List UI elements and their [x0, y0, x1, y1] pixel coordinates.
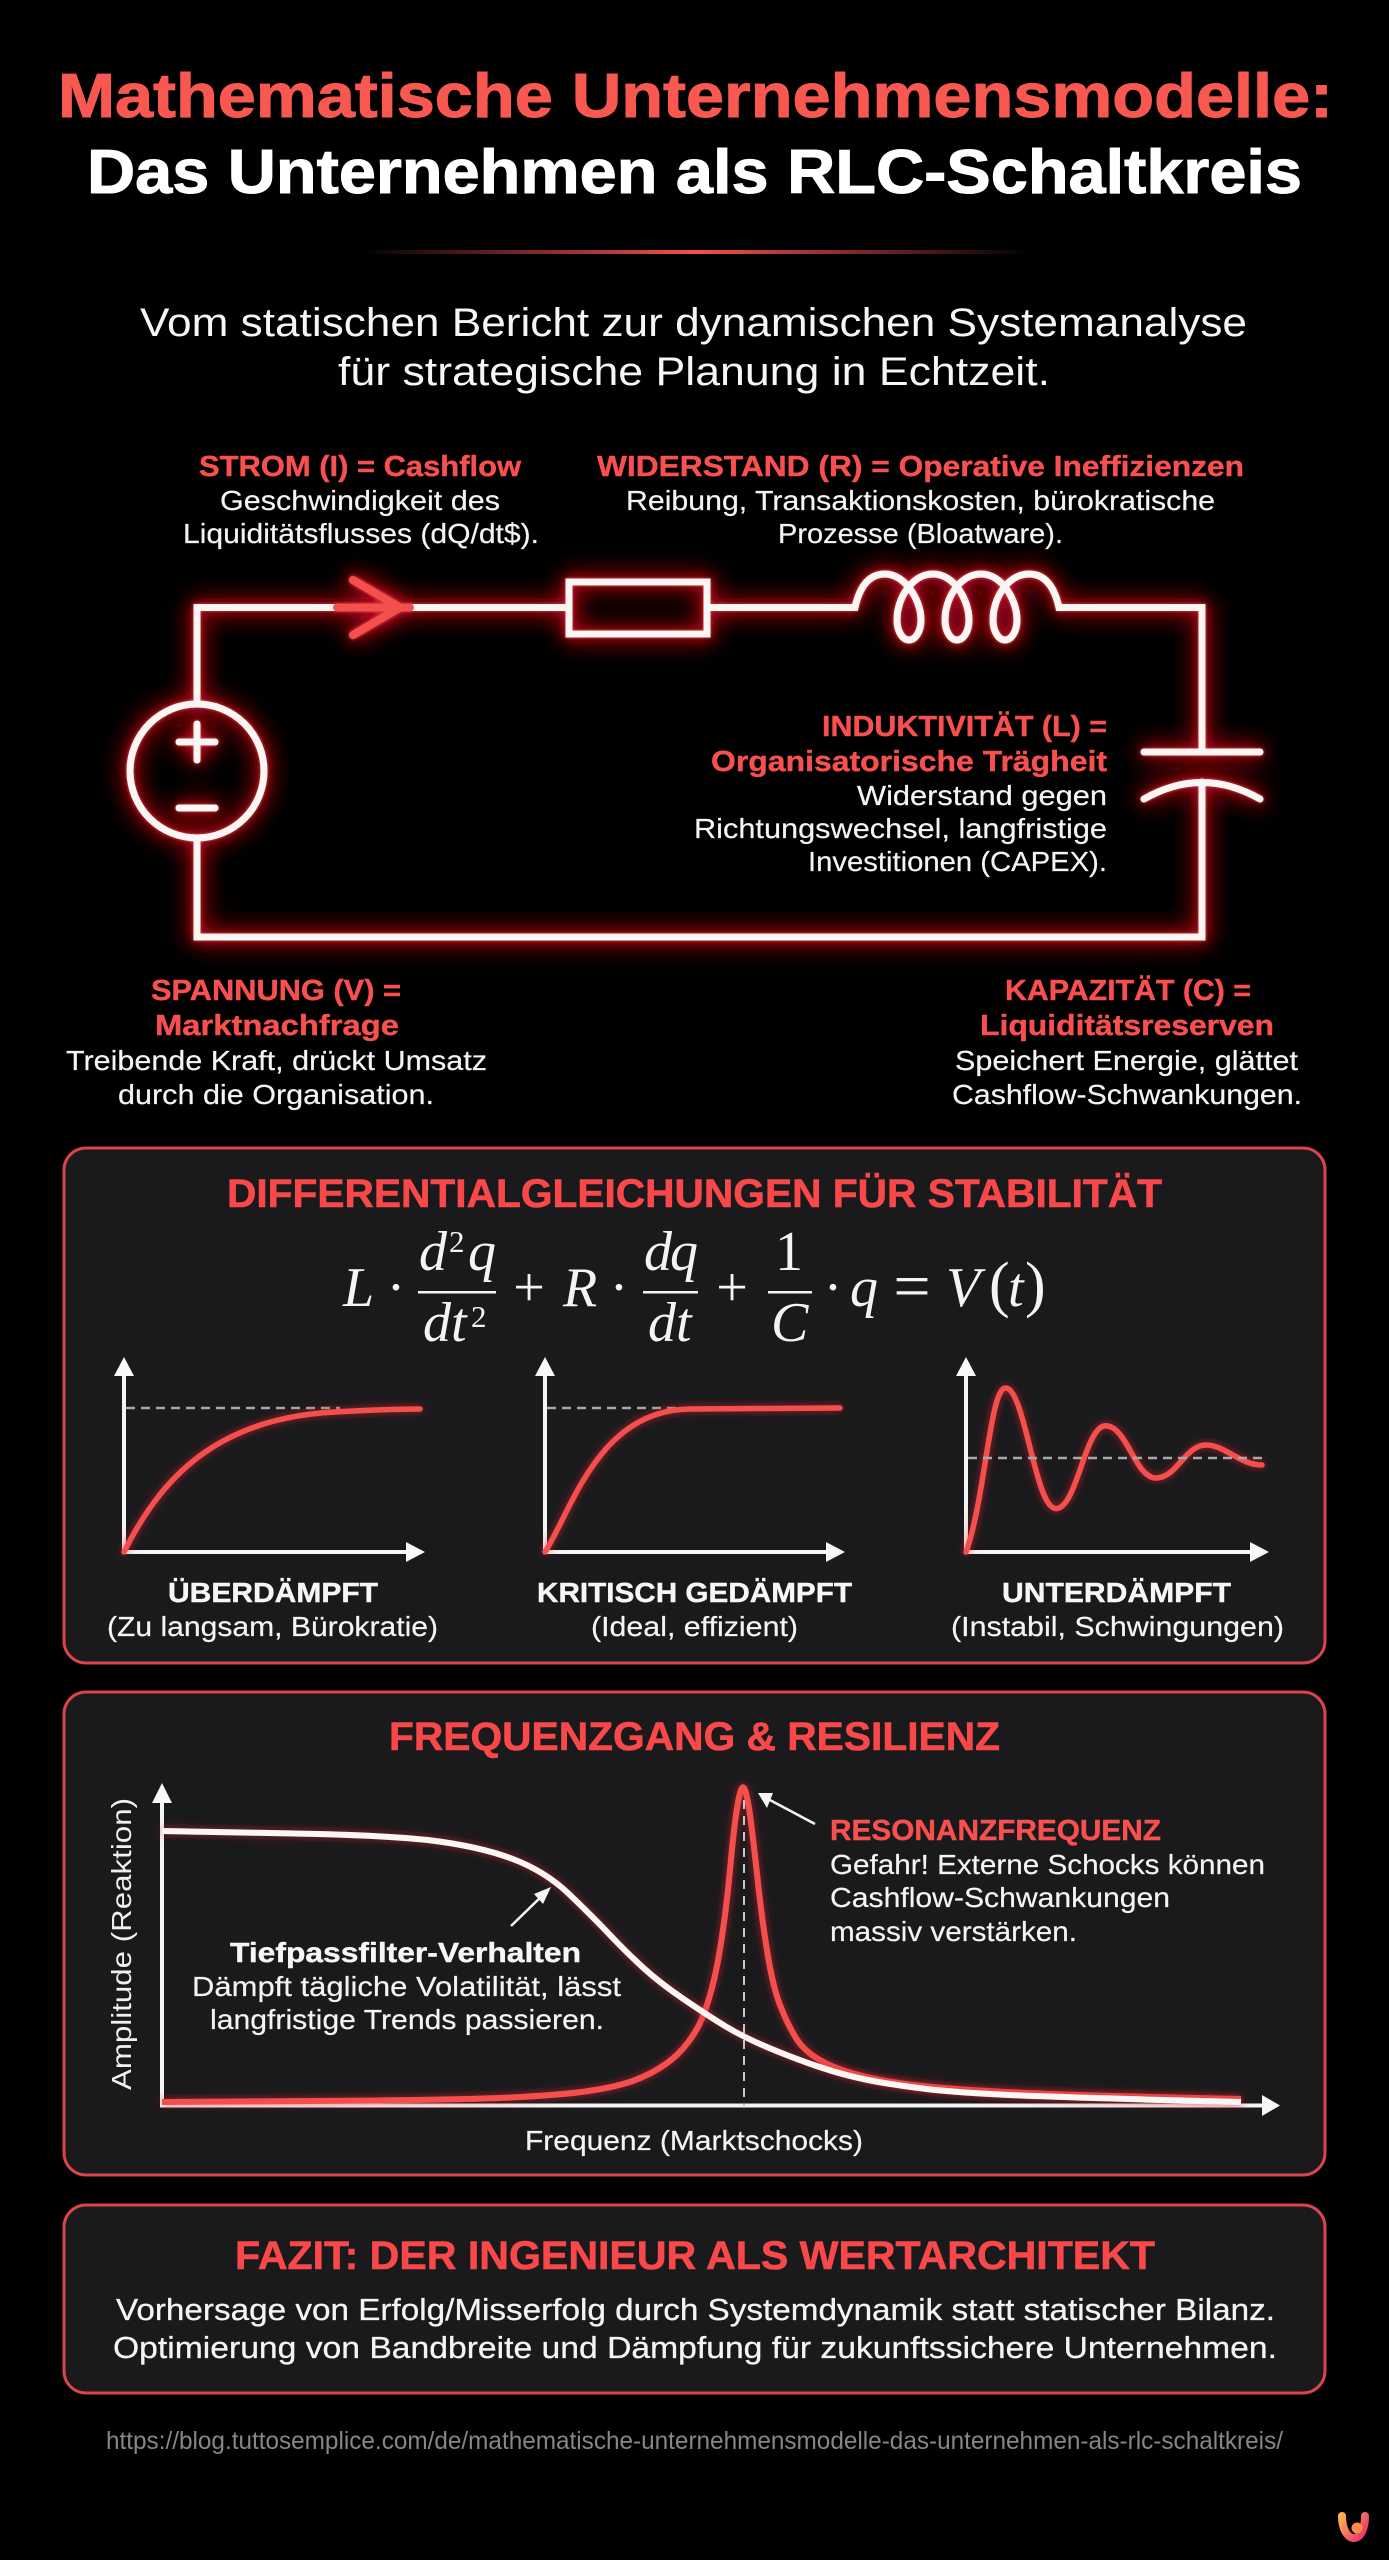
label: Spannung: SPANNUNG (V) =: [151, 975, 401, 1007]
icon: logo: [1342, 2516, 1365, 2538]
label: Kapazitaet: Liquiditätsreserven: [980, 1010, 1274, 1042]
title: [58, 62, 1333, 207]
callout: resonance: [830, 1815, 1265, 1947]
callout: low-pass: langfristige Trends passieren.: [210, 2004, 604, 2035]
callout: resonance: massiv verstärken.: [830, 1916, 1077, 1947]
label: Strom: Liquiditätsflusses (dQ/dt$).: [183, 518, 539, 549]
panel: conclusion: [64, 2205, 1325, 2393]
equation: 1: [775, 1221, 803, 1283]
chart label: overdamped: [107, 1577, 438, 1642]
equation: q: [850, 1257, 878, 1319]
conclusion text: Optimierung von Bandbreite und Dämpfung für zukunftssichere Unternehmen.: [113, 2330, 1277, 2365]
equation: R: [562, 1257, 597, 1319]
equation: [342, 1221, 1046, 1354]
label: Strom: Geschwindigkeit des: [220, 485, 500, 516]
label: Kapazitaet: KAPAZITÄT (C) =: [1005, 974, 1251, 1007]
panel: frequency response: [64, 1692, 1325, 2175]
equation: d: [644, 1221, 673, 1283]
equation: C: [771, 1292, 809, 1354]
equation: t: [451, 1292, 468, 1354]
capacitor: [1144, 752, 1260, 799]
title divider: [359, 250, 1032, 254]
equation: +: [513, 1257, 545, 1319]
chart: critically damped: [535, 1357, 845, 1562]
equation: q: [468, 1221, 496, 1283]
panel heading: FAZIT: DER INGENIEUR ALS WERTARCHITEKT: [235, 2234, 1155, 2278]
label: Kapazitaet: Speichert Energie, glättet: [955, 1045, 1298, 1076]
label: Spannung: [66, 975, 487, 1110]
chart label: overdamped: ÜBERDÄMPFT: [168, 1577, 378, 1608]
source url: https://blog.tuttosemplice.com/de/mathematische-unternehmensmodelle-das-unternehmen-als-rlc-schaltkreis/: [106, 2427, 1283, 2455]
equation: ·: [387, 1257, 405, 1319]
label: Widerstand: [597, 451, 1244, 549]
equation: ): [1025, 1251, 1046, 1319]
equation: 2: [471, 1299, 486, 1334]
label: Induktivitaet: Richtungswechsel, langfristige: [694, 813, 1107, 844]
equation: ·: [610, 1257, 628, 1319]
callout: low-pass: Dämpft tägliche Volatilität, lässt: [192, 1971, 621, 2002]
callout: resonance: Cashflow-Schwankungen: [830, 1882, 1170, 1913]
label: Spannung: Marktnachfrage: [155, 1010, 399, 1042]
panel: differential equations: [64, 1148, 1325, 1663]
label: Widerstand: Reibung, Transaktionskosten, bürokratische: [626, 485, 1215, 516]
label: Spannung: durch die Organisation.: [118, 1079, 434, 1110]
callout: low-pass: [192, 1937, 621, 2035]
callout: low-pass: Tiefpassfilter-Verhalten: [230, 1937, 581, 1968]
label: Induktivitaet: [694, 710, 1107, 877]
label: Kapazitaet: [952, 974, 1302, 1110]
label: Widerstand: Prozesse (Bloatware).: [778, 518, 1063, 549]
chart label: underdamped: UNTERDÄMPFT: [1002, 1577, 1231, 1608]
chart label: critically damped: KRITISCH GEDÄMPFT: [537, 1577, 852, 1608]
equation: +: [716, 1257, 748, 1319]
equation: L: [342, 1257, 374, 1319]
equation: t: [676, 1292, 693, 1354]
chart label: underdamped: [951, 1577, 1284, 1642]
equation: 2: [449, 1224, 464, 1259]
circuit diagram: [130, 574, 1260, 937]
label: Induktivitaet: INDUKTIVITÄT (L) =: [822, 710, 1107, 743]
equation: ·: [824, 1257, 842, 1319]
y axis label: Amplitude (Reaktion): [106, 1798, 137, 2090]
label: Widerstand: WIDERSTAND (R) = Operative Ineffizienzen: [597, 451, 1244, 483]
conclusion text: [113, 2292, 1277, 2365]
x axis label: Frequenz (Marktschocks): [525, 2125, 863, 2156]
arrow: low-pass: [511, 1887, 551, 1926]
callout: resonance: RESONANZFREQUENZ: [830, 1815, 1161, 1847]
arrow: resonance: [758, 1793, 815, 1824]
subtitle: [140, 301, 1247, 394]
chart label: critically damped: [537, 1577, 852, 1642]
chart: overdamped: [114, 1357, 425, 1562]
label: Strom: STROM (I) = Cashflow: [199, 451, 521, 483]
chart label: critically damped: (Ideal, effizient): [591, 1611, 798, 1642]
voltage source: [130, 704, 264, 838]
label: Kapazitaet: Cashflow-Schwankungen.: [952, 1079, 1302, 1110]
current arrow: [337, 580, 410, 635]
equation: V: [946, 1257, 986, 1319]
frequency chart: [152, 1783, 1280, 2116]
callout: resonance: Gefahr! Externe Schocks können: [830, 1849, 1265, 1880]
title: Mathematische Unternehmensmodelle:: [58, 62, 1333, 131]
equation: q: [670, 1221, 698, 1283]
equation: d: [419, 1221, 448, 1283]
label: Strom: [183, 451, 539, 549]
label: Induktivitaet: Organisatorische Trägheit: [711, 746, 1107, 778]
conclusion text: Vorhersage von Erfolg/Misserfolg durch Systemdynamik statt statischer Bilanz.: [116, 2292, 1275, 2327]
equation: =: [893, 1250, 931, 1323]
panel heading: DIFFERENTIALGLEICHUNGEN FÜR STABILITÄT: [227, 1171, 1162, 1216]
equation: t: [1008, 1257, 1025, 1319]
equation: d: [648, 1292, 677, 1354]
equation: (: [989, 1251, 1010, 1319]
title: Das Unternehmen als RLC-Schaltkreis: [87, 138, 1302, 207]
subtitle: Vom statischen Bericht zur dynamischen Systemanalyse: [140, 301, 1247, 345]
chart label: underdamped: (Instabil, Schwingungen): [951, 1611, 1284, 1642]
label: Spannung: Treibende Kraft, drückt Umsatz: [66, 1045, 487, 1076]
equation: d: [423, 1292, 452, 1354]
chart: underdamped: [956, 1357, 1269, 1562]
label: Induktivitaet: Investitionen (CAPEX).: [808, 846, 1107, 877]
resistor: [569, 582, 707, 634]
subtitle: für strategische Planung in Echtzeit.: [338, 350, 1050, 394]
chart label: overdamped: (Zu langsam, Bürokratie): [107, 1611, 438, 1642]
label: Induktivitaet: Widerstand gegen: [857, 780, 1107, 811]
wires and inductor coil: [197, 574, 1202, 937]
panel heading: FREQUENZGANG & RESILIENZ: [389, 1715, 1000, 1759]
